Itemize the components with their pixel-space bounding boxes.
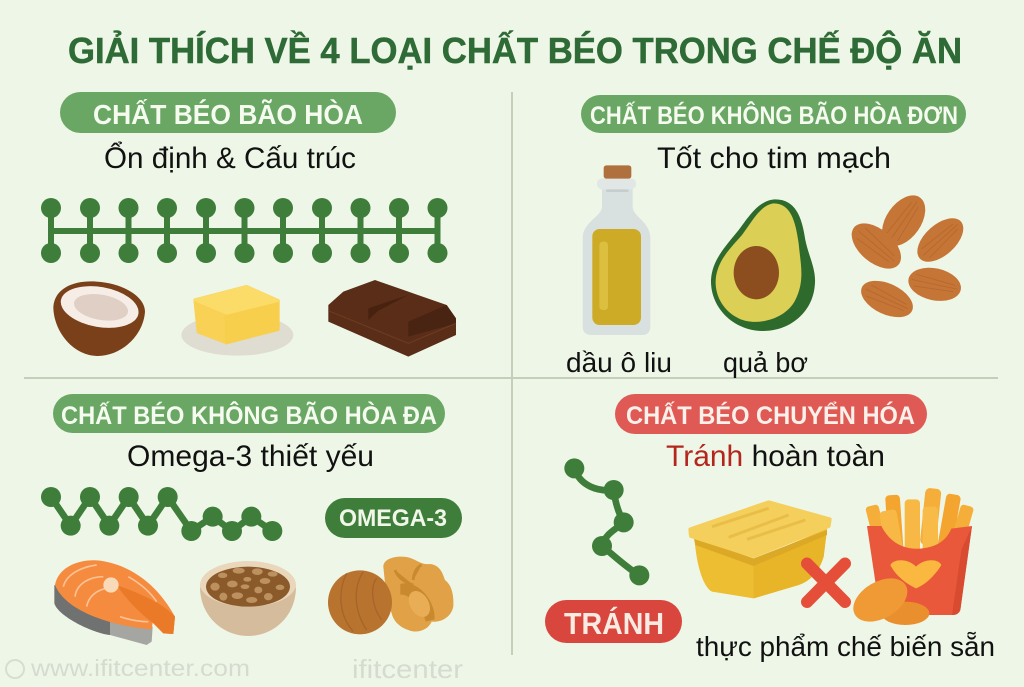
subtitle: good for the heart: Tốt cho tim mạch (657, 142, 891, 175)
label: processed foods: thực phẩm chế biến sẵn (696, 631, 995, 662)
heading pill: polyunsaturated fat: CHẤT BÉO KHÔNG BÃO HÒA ĐA (61, 400, 437, 430)
icon: avocado (711, 199, 815, 331)
subtitle: essential omega-3: Omega-3 thiết yếu (127, 440, 374, 473)
heading pill: saturated fat: CHẤT BÉO BÃO HÒA (93, 99, 363, 130)
icon: kinked polyunsaturated chain (41, 487, 282, 541)
heading pill: monounsaturated fat: CHẤT BÉO KHÔNG BÃO HÒA ĐƠN (590, 100, 958, 130)
label: olive oil: dầu ô liu (566, 347, 672, 378)
icon: butter on plate (181, 287, 293, 356)
watermark: website: www.ifitcenter.com (30, 655, 250, 681)
icon: coconut (53, 280, 145, 356)
panel: polyunsaturated fat (41, 394, 462, 645)
icon: straight saturated molecule chain (41, 198, 448, 263)
icon: salmon steak (54, 560, 175, 645)
icon: olive oil bottle (583, 165, 650, 335)
badge: omega-3 (325, 498, 462, 538)
heading pill: polyunsaturated fat (53, 394, 445, 433)
icon: margarine tub (690, 502, 830, 598)
badge: omega-3: OMEGA-3 (339, 505, 447, 532)
heading pill: trans fat: CHẤT BÉO CHUYỂN HÓA (626, 400, 915, 430)
heading pill: monounsaturated fat (581, 95, 966, 133)
panel: saturated fat (41, 92, 456, 357)
heading pill: trans fat (615, 394, 927, 434)
subtitle: avoid completely: Tránh hoàn toàn (666, 440, 885, 473)
badge: avoid: TRÁNH (564, 606, 664, 641)
icon: almonds (843, 188, 971, 325)
panel: monounsaturated fat (566, 95, 971, 378)
badge: avoid (545, 600, 682, 643)
subtitle: stable and structure: Ổn định & Cấu trúc (104, 141, 356, 175)
icon: trans fat molecule chain (564, 458, 649, 585)
panel: trans fat (545, 394, 995, 662)
icon: walnuts (328, 557, 453, 634)
label: avocado: quả bơ (723, 347, 808, 378)
icon: red cross (807, 564, 845, 602)
icon: chocolate bar (328, 280, 456, 357)
icon: fries and fried food (846, 488, 974, 631)
watermark: brand: ifitcenter (352, 654, 463, 684)
title: GIẢI THÍCH VỀ 4 LOẠI CHẤT BÉO TRONG CHẾ ĐỘ ĂN (68, 29, 962, 71)
heading pill: saturated fat (60, 92, 396, 133)
icon: bowl of seeds (200, 561, 296, 636)
